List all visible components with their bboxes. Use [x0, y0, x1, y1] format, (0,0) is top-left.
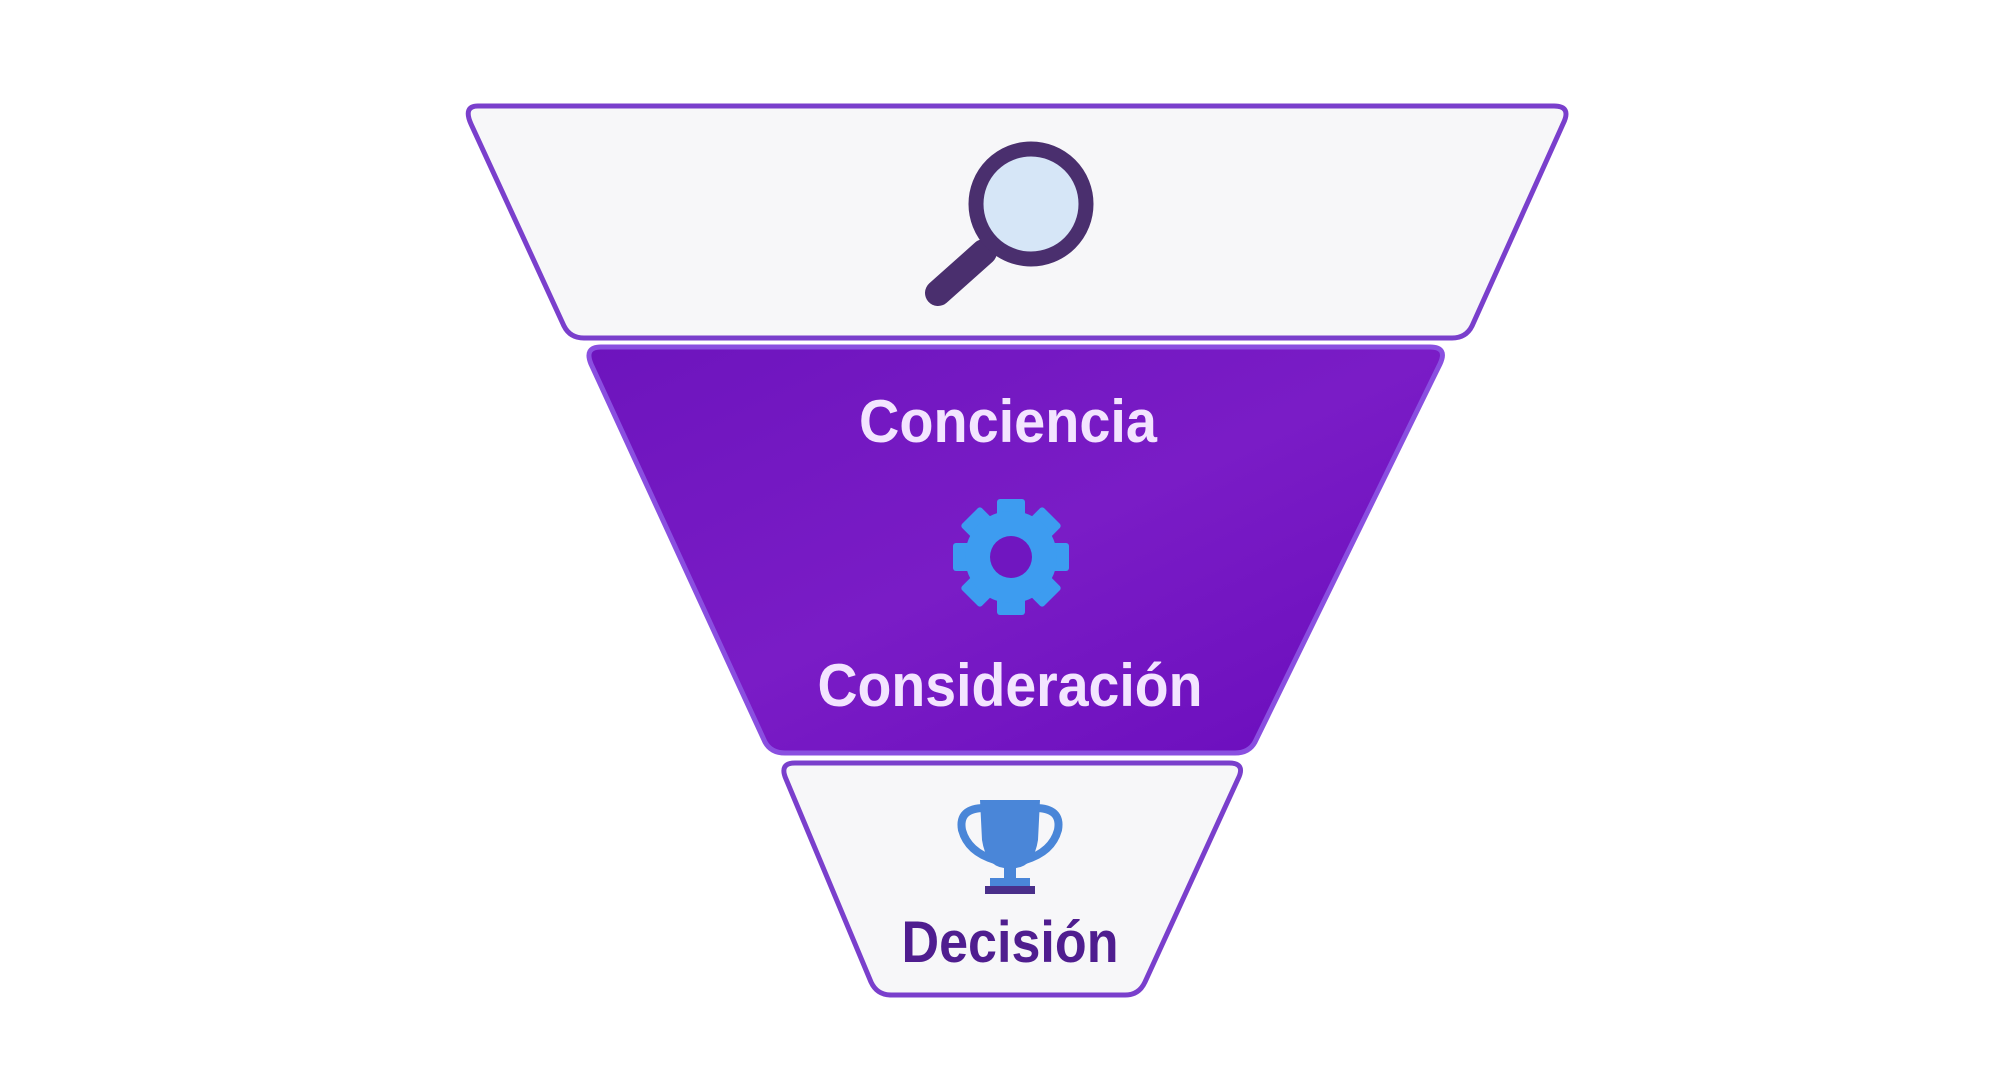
heading: Decisión: Decisión: [902, 910, 1118, 975]
panel: top funnel stage (awareness): [468, 106, 1566, 338]
heading: Conciencia: Conciencia: [859, 388, 1158, 455]
icon: trophy: [961, 800, 1059, 894]
panel: middle funnel stage (consideration): [589, 347, 1442, 753]
panel: bottom funnel stage (decision): [784, 763, 1241, 995]
heading: Consideración: Consideración: [818, 652, 1202, 719]
icon: gear: [953, 499, 1069, 615]
icon: magnifying glass: [938, 149, 1086, 293]
